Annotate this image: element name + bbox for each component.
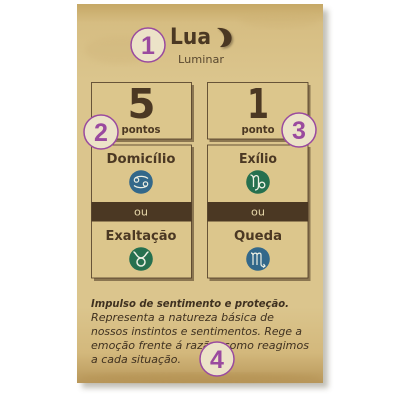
heading: Domicílio: Domicílio bbox=[106, 151, 176, 167]
parchment card bbox=[77, 4, 323, 383]
panel: Exílio ou Queda bbox=[208, 145, 310, 281]
callout 4: 4 bbox=[210, 346, 224, 374]
panel: 5 pontos: 5 bbox=[128, 80, 156, 128]
icon: Taurus bbox=[129, 247, 153, 271]
band: ou: ou bbox=[251, 206, 265, 218]
callout 3: 3 bbox=[292, 117, 306, 145]
description text: a cada situação. bbox=[91, 353, 181, 366]
icon: Cancer bbox=[129, 170, 153, 194]
callout 3 bbox=[282, 113, 316, 147]
panel: 1 ponto: ponto bbox=[242, 123, 275, 136]
icon: Scorpio bbox=[246, 247, 270, 271]
panel: 5 pontos: pontos bbox=[122, 123, 161, 136]
callout 4 bbox=[200, 342, 234, 376]
description text bbox=[91, 297, 309, 366]
title: Lua: Lua bbox=[170, 25, 211, 50]
heading: Exaltação: Exaltação bbox=[106, 228, 176, 244]
callout 2: 2 bbox=[94, 119, 108, 147]
description text: Impulso de sentimento e proteção. bbox=[91, 297, 289, 310]
panel: 1 ponto: 1 bbox=[247, 80, 269, 128]
description text: nossos instintos e sentimentos. Rege a bbox=[91, 325, 302, 338]
callout 1 bbox=[131, 28, 165, 62]
panel: 1 ponto bbox=[208, 80, 310, 142]
card shadow bbox=[82, 10, 328, 388]
description text: emoção frente á razão, como reagimos bbox=[91, 339, 309, 352]
panel: Domicílio ou Exaltação bbox=[92, 145, 194, 281]
heading: Queda: Queda bbox=[234, 228, 282, 244]
subtitle: Luminar bbox=[178, 53, 224, 66]
heading: Exílio: Exílio bbox=[239, 151, 277, 167]
description text: Representa a natureza básica de bbox=[91, 311, 274, 324]
panel: 5 pontos bbox=[92, 80, 194, 142]
icon: crescent moon bbox=[217, 28, 233, 49]
callout 1: 1 bbox=[141, 32, 155, 60]
band: ou: ou bbox=[134, 206, 148, 218]
icon: Capricorn bbox=[246, 170, 270, 194]
callout 2 bbox=[84, 115, 118, 149]
